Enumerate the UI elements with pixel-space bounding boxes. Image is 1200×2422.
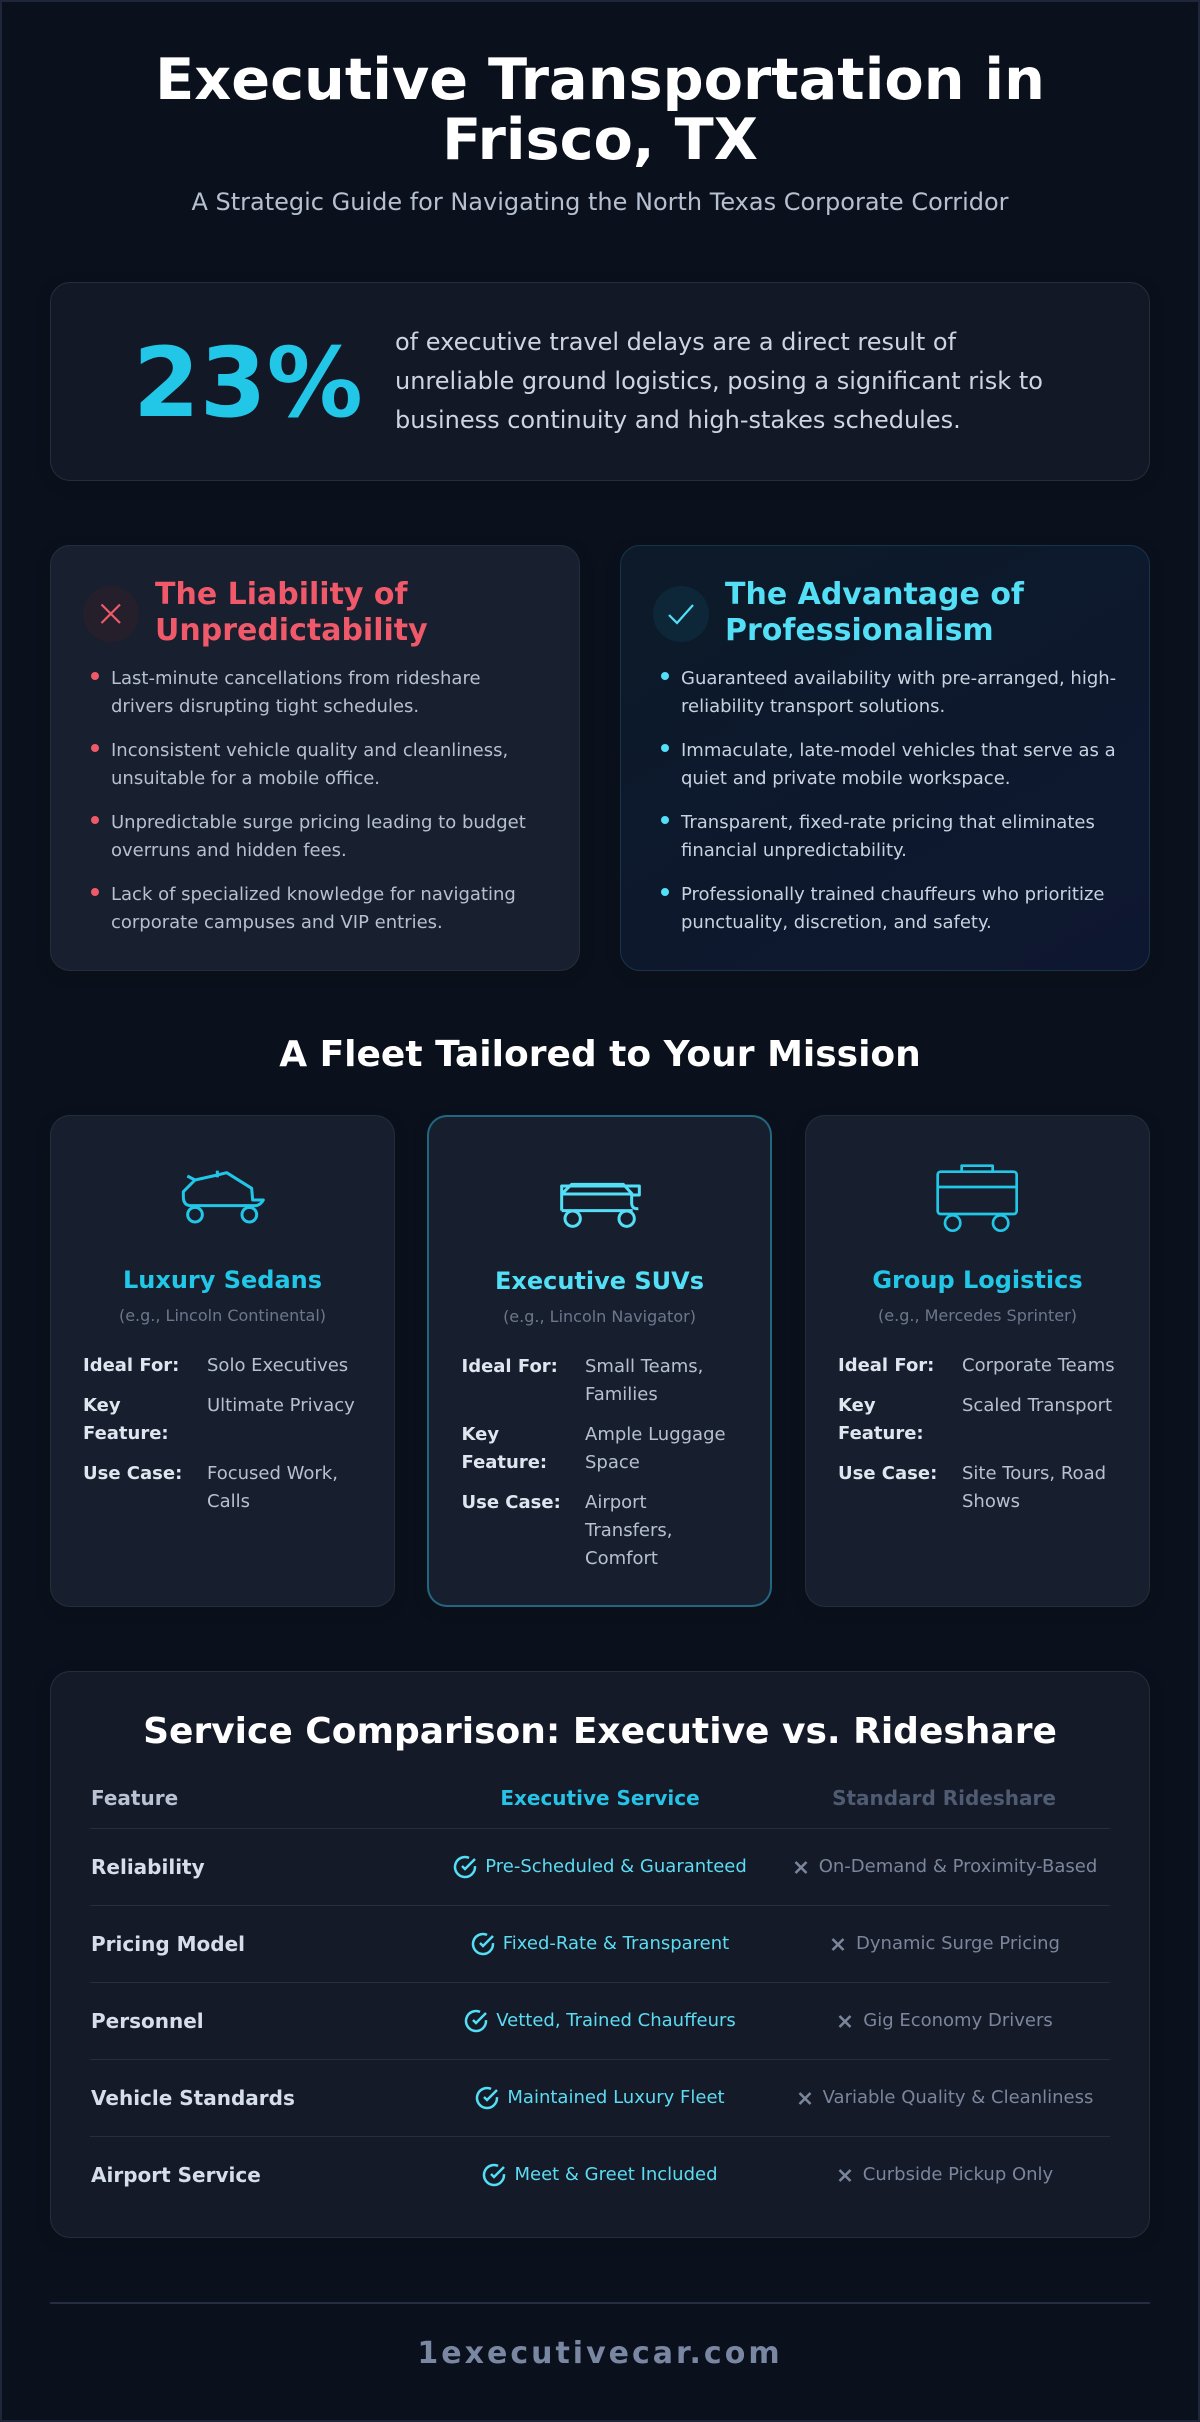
executive value: Meet & Greet Included — [514, 2164, 718, 2184]
title — [155, 46, 1045, 173]
spec: use case: Calls — [207, 1491, 250, 1512]
heading — [155, 577, 428, 648]
spec: use case: Transfers, — [585, 1520, 672, 1541]
panel: service comparison table — [50, 1671, 1150, 2238]
spec: use case — [462, 1492, 672, 1569]
panel: the liability of unpredictability — [50, 545, 580, 971]
heading: Professionalism — [725, 613, 994, 648]
vehicle name: Group Logistics — [872, 1266, 1083, 1294]
row label: Personnel — [91, 2009, 204, 2033]
spec: ideal for — [838, 1355, 1115, 1376]
spec: key feature: Feature: — [462, 1452, 547, 1473]
bullet — [661, 812, 1095, 861]
spec: key feature: Ultimate Privacy — [207, 1395, 355, 1416]
icon: red cross — [83, 586, 139, 642]
icon: sedan — [182, 1170, 265, 1224]
spec: use case: Comfort — [585, 1548, 658, 1569]
icon: SUV — [560, 1182, 641, 1228]
vehicle name: Luxury Sedans — [123, 1266, 322, 1294]
spec: ideal for: Ideal For: — [83, 1355, 179, 1376]
bullet: unsuitable for a mobile office. — [111, 768, 380, 789]
bullet — [661, 668, 1116, 717]
example model: (e.g., Lincoln Navigator) — [503, 1307, 696, 1326]
row: reliability — [91, 1855, 1097, 1879]
row label: Pricing Model — [91, 1932, 245, 1956]
spec: use case: Use Case: — [838, 1463, 937, 1484]
panel: luxury sedans — [50, 1115, 395, 1607]
spec: key feature: Key — [462, 1424, 499, 1445]
spec: ideal for — [83, 1355, 348, 1376]
spec: use case — [838, 1463, 1106, 1512]
footer: website: 1executivecar.com — [417, 2336, 783, 2371]
vehicle name: Executive SUVs — [495, 1266, 704, 1294]
bullet — [661, 884, 1104, 933]
bullet — [91, 812, 526, 861]
bullet: punctuality, discretion, and safety. — [681, 912, 992, 933]
bullet: overruns and hidden fees. — [111, 840, 347, 861]
spec: use case: Site Tours, Road — [962, 1463, 1106, 1484]
statistic description: unreliable ground logistics, posing a significant risk to — [395, 367, 1043, 395]
heading: fleet section: A Fleet Tailored to Your Mission — [279, 1034, 921, 1075]
heading: Unpredictability — [155, 613, 428, 648]
spec: key feature: Space — [585, 1452, 640, 1473]
spec: ideal for — [462, 1356, 703, 1405]
bullet: reliability transport solutions. — [681, 696, 945, 717]
heading — [725, 577, 1024, 648]
subtitle: A Strategic Guide for Navigating the North Texas Corporate Corridor — [191, 188, 1009, 216]
bullet: Lack of specialized knowledge for navigating — [111, 884, 516, 905]
example model: (e.g., Lincoln Continental) — [119, 1306, 326, 1325]
bullet: Immaculate, late-model vehicles that serve as a — [681, 740, 1116, 761]
example model: (e.g., Mercedes Sprinter) — [878, 1306, 1077, 1325]
bullet: corporate campuses and VIP entries. — [111, 912, 443, 933]
heading: The Advantage of — [725, 577, 1024, 612]
title: Frisco, TX — [442, 106, 758, 173]
row label: Reliability — [91, 1855, 205, 1879]
title: Executive Transportation in — [155, 46, 1045, 113]
icon: cyan check — [653, 586, 709, 642]
spec: ideal for: Corporate Teams — [962, 1355, 1115, 1376]
spec: use case: Airport — [585, 1492, 647, 1513]
row: personnel — [91, 2009, 1053, 2033]
spec: key feature: Key — [83, 1395, 121, 1416]
spec: use case: Focused Work, — [207, 1463, 338, 1484]
bullet: quiet and private mobile workspace. — [681, 768, 1010, 789]
column header: feature: Feature — [91, 1786, 178, 1810]
spec: key feature: Key — [838, 1395, 876, 1416]
spec: use case — [83, 1463, 338, 1512]
panel: the advantage of professionalism — [620, 545, 1150, 971]
bullet: financial unpredictability. — [681, 840, 907, 861]
rideshare value: Gig Economy Drivers — [863, 2010, 1053, 2030]
row label: Vehicle Standards — [91, 2086, 295, 2110]
executive value: Maintained Luxury Fleet — [507, 2086, 725, 2108]
rideshare value: Variable Quality & Cleanliness — [823, 2086, 1093, 2108]
spec: key feature: Feature: — [83, 1423, 169, 1444]
bullet: Transparent, fixed-rate pricing that eliminates — [681, 812, 1095, 833]
spec: key feature: Ample Luggage — [585, 1424, 726, 1445]
spec: ideal for: Families — [585, 1384, 658, 1405]
column header: executive service: Executive Service — [500, 1786, 700, 1810]
row label: Airport Service — [91, 2163, 261, 2187]
panel: key statistic — [50, 282, 1150, 481]
bullet — [91, 740, 508, 789]
bullet: Inconsistent vehicle quality and cleanliness, — [111, 740, 508, 761]
row: vehicle standards — [91, 2086, 1093, 2110]
executive value: Fixed-Rate & Transparent — [503, 1932, 729, 1954]
spec: ideal for: Solo Executives — [207, 1355, 348, 1376]
spec: key feature: Feature: — [838, 1423, 924, 1444]
executive value: Pre-Scheduled & Guaranteed — [485, 1856, 747, 1876]
spec: key feature — [462, 1424, 726, 1473]
heading: The Liability of — [155, 577, 408, 612]
row: airport service — [91, 2163, 1053, 2187]
bullet: Last-minute cancellations from rideshare — [111, 668, 481, 689]
spec: key feature — [83, 1395, 355, 1444]
statistic description: of executive travel delays are a direct result of — [395, 328, 956, 356]
bullet — [91, 884, 516, 933]
bullet: Unpredictable surge pricing leading to budget — [111, 812, 526, 833]
column header: standard rideshare: Standard Rideshare — [832, 1786, 1056, 1810]
spec: ideal for: Small Teams, — [585, 1356, 703, 1377]
bullet — [661, 740, 1116, 789]
spec: ideal for: Ideal For: — [838, 1355, 934, 1376]
spec: use case: Shows — [962, 1491, 1020, 1512]
spec: key feature — [838, 1395, 1112, 1444]
spec: use case: Use Case: — [462, 1492, 561, 1513]
icon: van — [936, 1164, 1018, 1232]
statistic description: business continuity and high-stakes schedules. — [395, 406, 961, 434]
statistic description — [395, 328, 1043, 434]
executive value: Vetted, Trained Chauffeurs — [496, 2010, 736, 2030]
bullet — [91, 668, 481, 717]
bullet: Professionally trained chauffeurs who prioritize — [681, 884, 1104, 905]
spec: key feature: Scaled Transport — [962, 1395, 1112, 1416]
rideshare value: On-Demand & Proximity-Based — [819, 1856, 1097, 1876]
spec: use case: Use Case: — [83, 1463, 182, 1484]
rideshare value: Dynamic Surge Pricing — [856, 1932, 1060, 1954]
bullet: drivers disrupting tight schedules. — [111, 696, 419, 717]
rideshare value — [785, 2160, 1105, 2188]
spec: ideal for: Ideal For: — [462, 1356, 558, 1377]
rideshare value: Curbside Pickup Only — [863, 2164, 1053, 2184]
row: pricing model — [91, 1932, 1060, 1956]
panel: executive SUVs — [427, 1115, 772, 1607]
heading: comparison: Service Comparison: Executive vs. Rideshare — [143, 1710, 1057, 1752]
bullet: Guaranteed availability with pre-arranged, high- — [681, 668, 1116, 689]
big number: 23%: 23% — [133, 327, 363, 439]
panel: group logistics — [805, 1115, 1150, 1607]
